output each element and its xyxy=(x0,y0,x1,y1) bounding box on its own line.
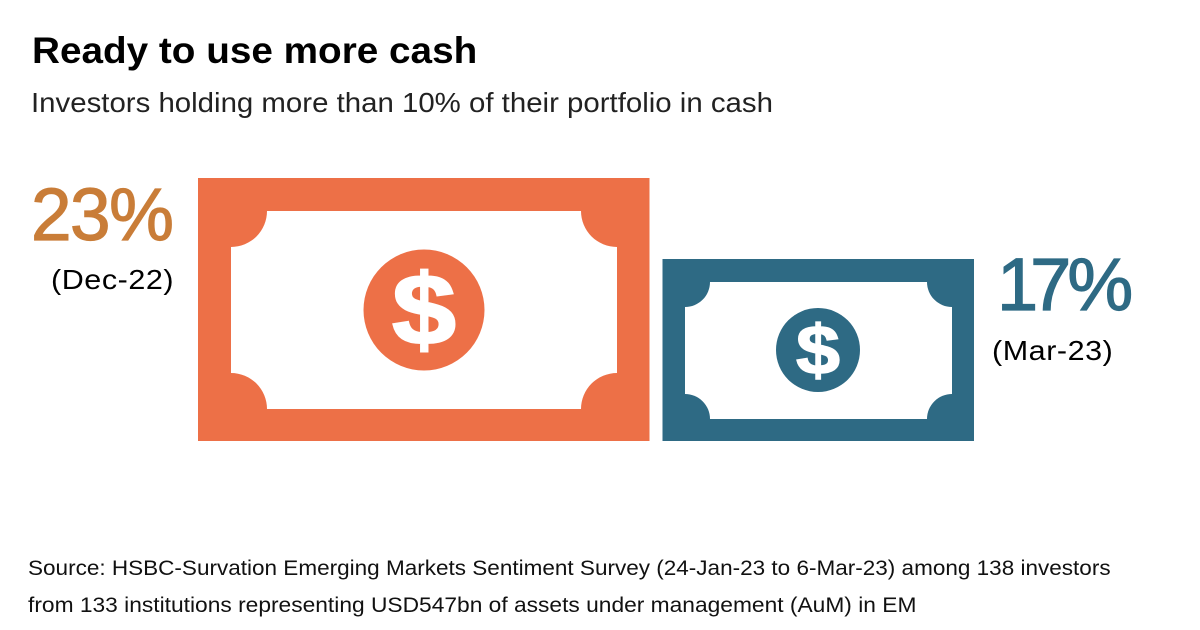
source note: from 133 institutions representing USD547bn of assets under management (AuM) in EM xyxy=(28,594,916,617)
source note: Source: HSBC-Survation Emerging Markets Sentiment Survey (24-Jan-23 to 6-Mar-23) among 138 investors xyxy=(28,557,1111,580)
date label: Dec-22: (Dec-22) xyxy=(51,264,174,295)
icon: orange banknote: $ xyxy=(392,253,456,365)
title: Ready to use more cash xyxy=(32,30,477,71)
icon: blue banknote xyxy=(662,259,974,441)
stat: 23%: 23% xyxy=(31,173,172,256)
stat: 17%: 17% xyxy=(997,243,1133,326)
subtitle: Investors holding more than 10% of their portfolio in cash xyxy=(31,87,773,118)
icon: orange banknote xyxy=(198,178,650,441)
date label: Mar-23: (Mar-23) xyxy=(992,335,1113,366)
icon: blue banknote: $ xyxy=(796,310,840,389)
source note xyxy=(28,557,1111,617)
